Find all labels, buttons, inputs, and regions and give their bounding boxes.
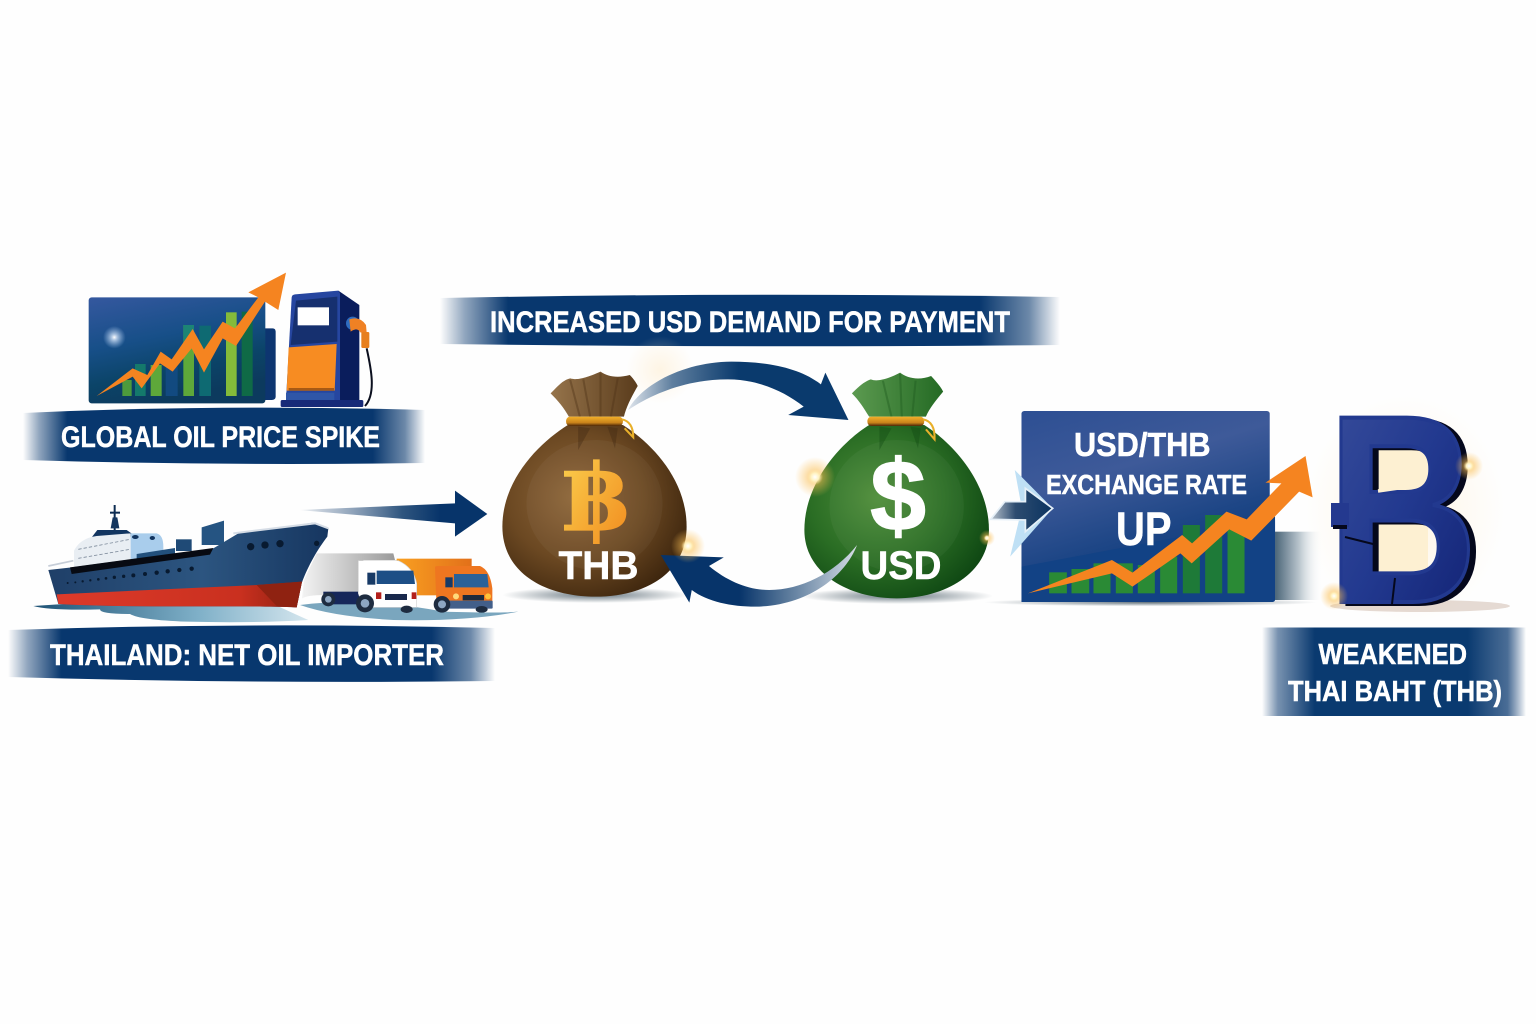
glow: sparkles on baht — [1320, 452, 1483, 610]
icon: THB money bag — [502, 372, 688, 603]
icon: baht symbol: B — [1327, 359, 1478, 659]
glow: sparkles on bags — [671, 457, 995, 563]
text: baht symbol on THB bag: ฿ — [563, 444, 627, 552]
banner: weakened Thai Baht: WEAKENED — [1318, 639, 1467, 671]
text: USD label: USD — [860, 544, 942, 588]
glow: behind arrows — [626, 336, 694, 404]
icon: cargo ship — [33, 505, 328, 622]
arrow: USD to exchange rate — [991, 470, 1053, 557]
icon: USD money bag — [800, 373, 993, 604]
icon: rising price chart — [89, 273, 286, 403]
glow: behind baht symbol — [1305, 395, 1505, 625]
panel: global oil price spike — [23, 273, 425, 464]
banner: increased USD demand for payment: INCREASED USD DEMAND FOR PAYMENT — [490, 306, 1010, 339]
banner: Thailand net oil importer: THAILAND: NET OIL IMPORTER — [50, 639, 444, 672]
panel: USD/THB exchange rate — [984, 411, 1323, 606]
icon: fuel pump — [281, 291, 372, 407]
text: THB label: THB — [558, 544, 638, 588]
text: dollar symbol on USD bag: $ — [870, 440, 926, 552]
banner: global oil price spike — [23, 408, 425, 464]
banner: weakened Thai Baht — [1262, 628, 1526, 716]
banner: weakened Thai Baht: THAI BAHT (THB) — [1288, 676, 1502, 708]
chart panel — [984, 411, 1323, 606]
banner: global oil price spike: GLOBAL OIL PRICE SPIKE — [61, 421, 380, 454]
arrow: USD to THB — [661, 545, 857, 607]
shadow under baht symbol — [1330, 600, 1510, 612]
icon: trucks — [300, 553, 518, 620]
arrow: THB to USD — [628, 362, 848, 420]
text: exchange rate: EXCHANGE RATE — [1046, 469, 1247, 500]
panel: weakened Thai Baht — [1262, 359, 1526, 716]
banner: increased USD demand for payment — [440, 295, 1060, 346]
text: up: UP — [1116, 502, 1172, 555]
banner: Thailand net oil importer — [8, 625, 495, 682]
text: USD/THB: USD/THB — [1074, 426, 1210, 463]
icon: baht symbol: B — [1333, 361, 1484, 661]
bars — [1049, 515, 1245, 593]
arrow: import to THB — [298, 491, 487, 537]
panel: Thailand net oil importer — [8, 491, 518, 682]
